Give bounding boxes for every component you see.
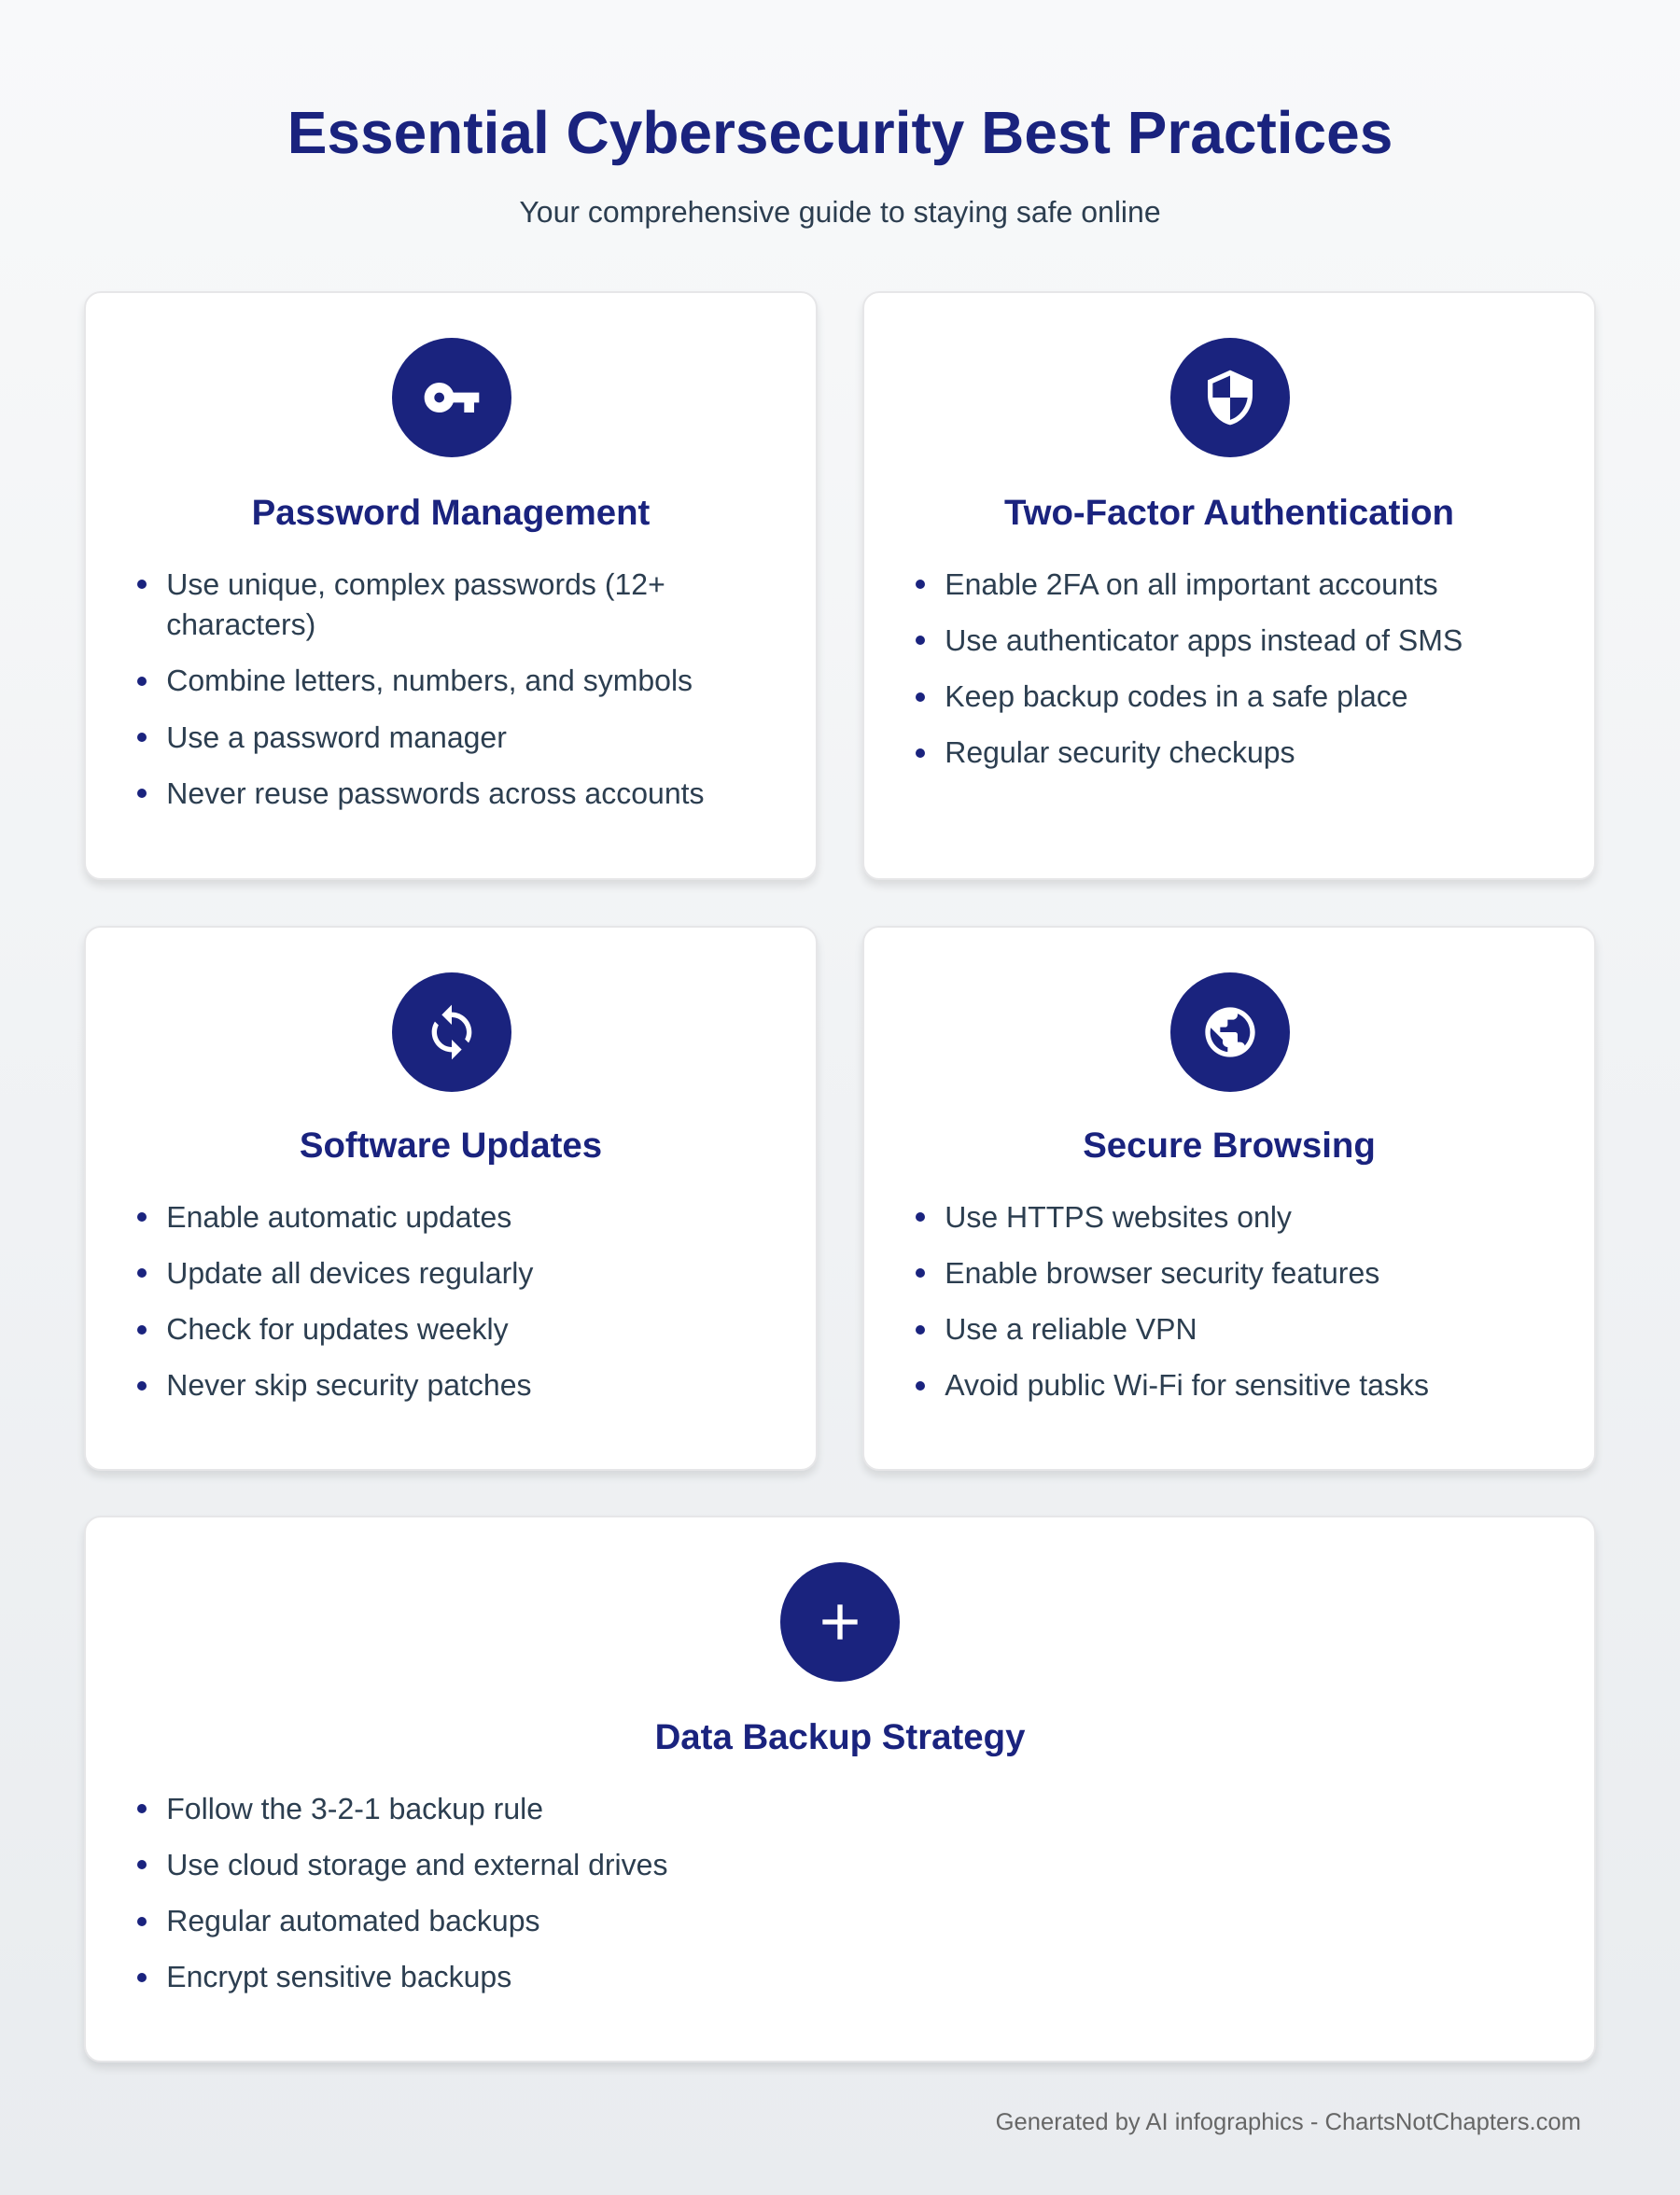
list: 2FA tips: Enable 2FA on all important accounts — [945, 567, 1438, 601]
list: browsing tips: Use a reliable VPN — [945, 1312, 1197, 1346]
list: backup tips: Follow the 3-2-1 backup rule — [166, 1792, 543, 1825]
heading: password management: Password Management — [252, 493, 650, 533]
list: 2FA tips — [916, 567, 1463, 769]
list: update tips: Enable automatic updates — [166, 1200, 511, 1234]
list: update tips: Check for updates weekly — [166, 1312, 509, 1346]
list: browsing tips — [916, 1200, 1429, 1402]
list: 2FA tips: Keep backup codes in a safe place — [945, 679, 1408, 713]
icon: plus — [780, 1562, 900, 1682]
panel: two-factor authentication — [862, 291, 1596, 880]
list: 2FA tips: Use authenticator apps instead of SMS — [945, 623, 1463, 657]
list: browsing tips: Avoid public Wi-Fi for sensitive tasks — [945, 1368, 1429, 1402]
list: password tips: Combine letters, numbers, and symbols — [166, 664, 693, 697]
list: password tips: Use a password manager — [166, 720, 507, 754]
icon: globe — [1170, 972, 1290, 1092]
list: password tips: Use unique, complex passwords (12+ characters) — [166, 567, 665, 641]
footer credit: Generated by AI infographics - ChartsNotChapters.com — [996, 2109, 1581, 2135]
subtitle: Your comprehensive guide to staying safe online — [519, 195, 1161, 229]
list: 2FA tips: Regular security checkups — [945, 735, 1295, 769]
list: password tips — [137, 567, 704, 810]
list: backup tips: Encrypt sensitive backups — [166, 1960, 511, 1993]
list: update tips: Update all devices regularly — [166, 1256, 533, 1290]
panel: secure browsing — [862, 926, 1596, 1471]
heading: secure browsing: Secure Browsing — [1083, 1125, 1376, 1166]
heading: data backup strategy: Data Backup Strategy — [655, 1717, 1025, 1757]
list: backup tips — [137, 1792, 667, 1993]
list: update tips — [137, 1200, 534, 1402]
list: backup tips: Regular automated backups — [166, 1904, 539, 1937]
icon: key — [392, 338, 511, 457]
panel: software updates — [84, 926, 818, 1471]
panel: password management — [84, 291, 818, 880]
list: browsing tips: Use HTTPS websites only — [945, 1200, 1292, 1234]
list: password tips: Never reuse passwords across accounts — [166, 776, 704, 810]
panel: data backup strategy — [84, 1516, 1596, 2062]
icon: sync arrows — [392, 972, 511, 1092]
heading: two-factor authentication: Two-Factor Authentication — [1004, 493, 1454, 533]
list: update tips: Never skip security patches — [166, 1368, 532, 1402]
list: backup tips: Use cloud storage and external drives — [166, 1848, 667, 1881]
icon: shield — [1170, 338, 1290, 457]
heading: software updates: Software Updates — [300, 1125, 602, 1166]
list: browsing tips: Enable browser security features — [945, 1256, 1379, 1290]
title: Essential Cybersecurity Best Practices — [287, 99, 1393, 166]
